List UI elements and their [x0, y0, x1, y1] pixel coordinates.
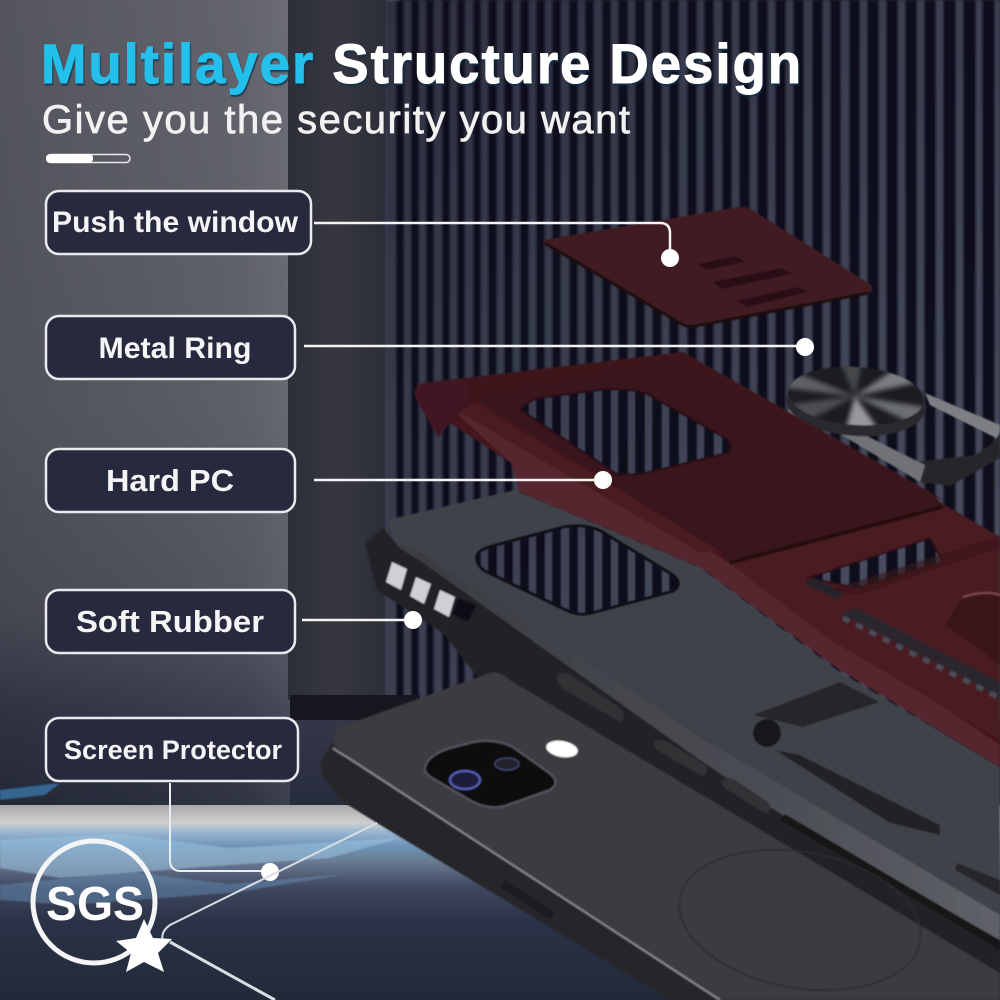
label: Screen Protector: Screen Protector — [64, 735, 282, 765]
progress bar accent — [46, 154, 130, 163]
side buttons — [557, 673, 771, 814]
phone layer: push window — [543, 207, 873, 327]
connector: Metal Ring — [304, 338, 814, 356]
label: Push the window — [46, 191, 311, 254]
background: blue lit floor — [0, 783, 1000, 1000]
star — [116, 919, 172, 972]
magnetic ring outline — [668, 832, 932, 1000]
subtitle: Give you the security you want — [42, 98, 630, 142]
label: Screen Protector — [46, 718, 298, 781]
connector: Push the window — [314, 223, 679, 267]
label: Metal Ring — [46, 316, 295, 379]
SIM slots — [386, 562, 455, 617]
background: striped wall — [385, 0, 1000, 720]
label: Hard PC: Hard PC — [106, 463, 234, 498]
SGS badge — [33, 823, 377, 1000]
phone layer: hard PC — [414, 351, 1000, 767]
phone layer: screen protector and phone — [320, 672, 1000, 1000]
side rail — [365, 528, 1000, 990]
camera cutout and kickstand window — [478, 389, 942, 614]
label: Metal Ring: Metal Ring — [98, 332, 252, 365]
camera ring — [474, 524, 680, 616]
camera island — [425, 741, 556, 807]
background: curtain panel — [288, 0, 386, 700]
kickstand mesh — [803, 578, 843, 600]
SGS badge: SGS — [46, 878, 144, 931]
background: grey wall — [0, 0, 400, 810]
flash — [545, 738, 579, 760]
title: Multilayer Structure Design — [41, 32, 803, 95]
kickstand disc — [945, 594, 1000, 665]
connector: Soft Rubber — [302, 611, 422, 629]
phone layer: metal ring — [784, 362, 1000, 486]
label: Push the window: Push the window — [52, 206, 299, 239]
label: Hard PC — [46, 449, 295, 512]
label: Soft Rubber: Soft Rubber — [76, 604, 264, 639]
background: dark base — [290, 695, 420, 720]
label: Soft Rubber — [46, 590, 295, 653]
connector: Screen Protector — [170, 783, 279, 881]
connector: Hard PC — [314, 471, 612, 489]
phone layer: soft rubber — [365, 490, 1000, 973]
grip texture — [753, 682, 880, 727]
